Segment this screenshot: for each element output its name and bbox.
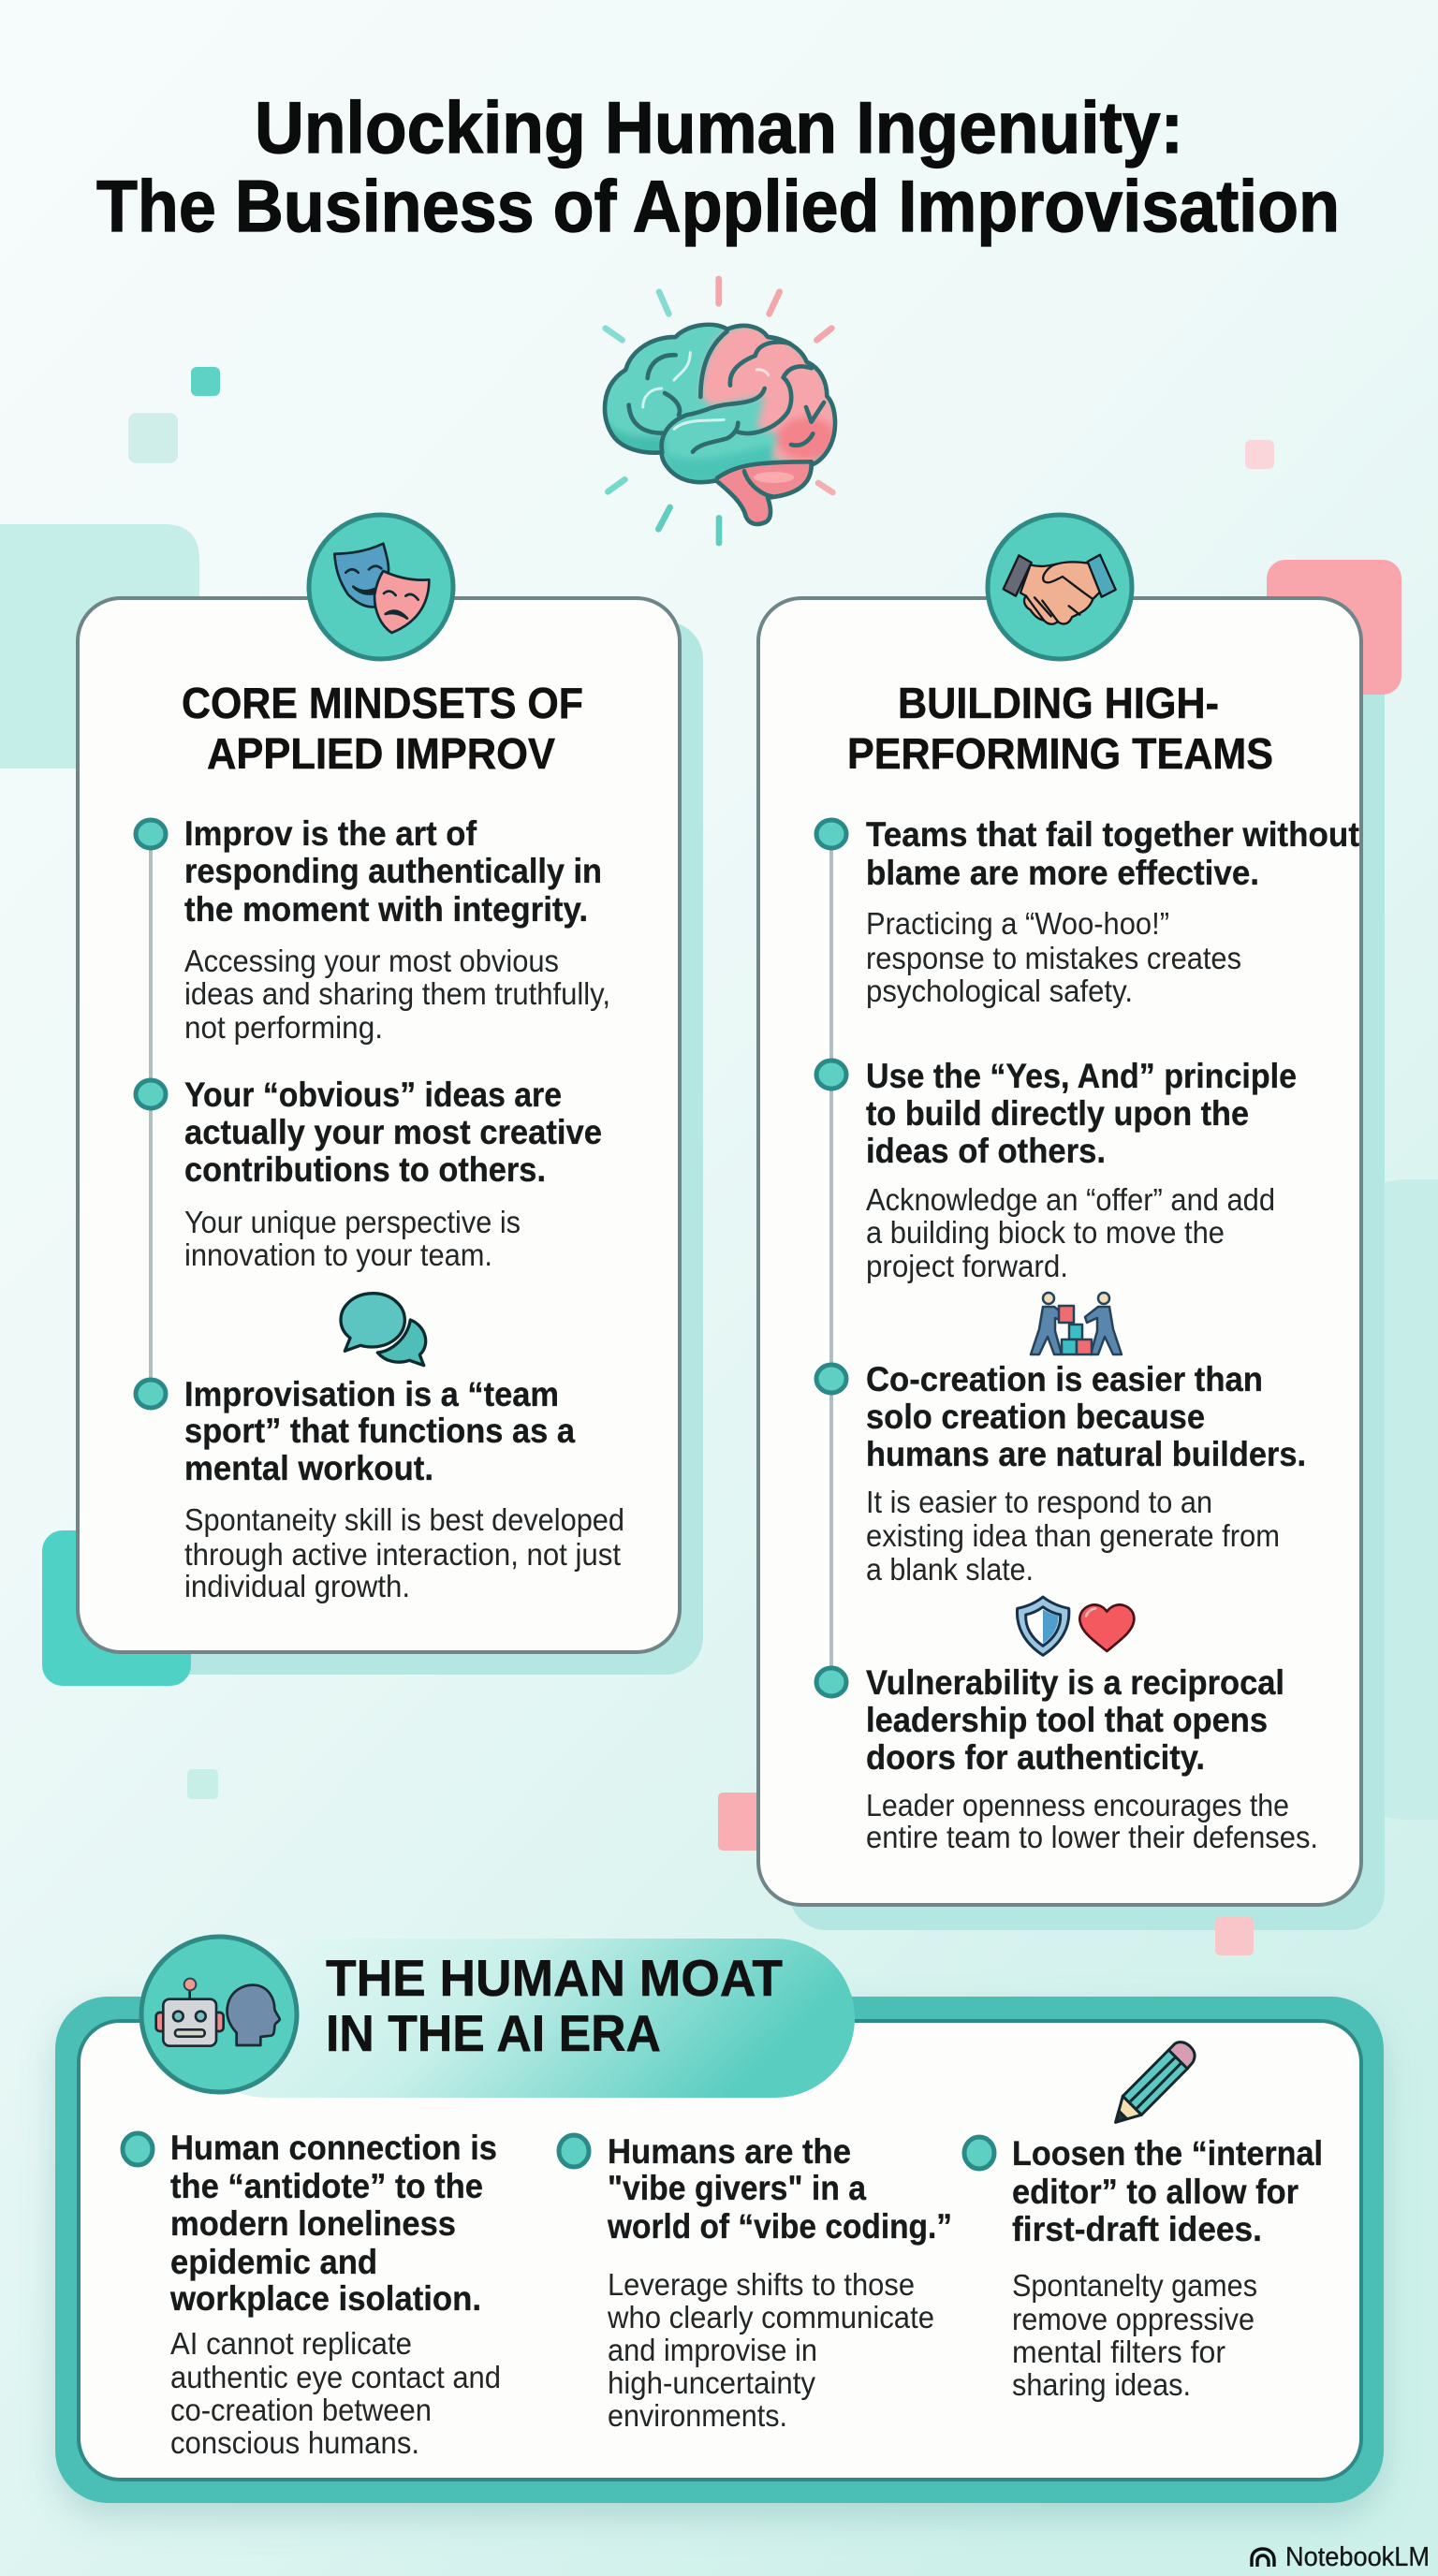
card [758, 598, 1361, 1905]
item: improv art: responding authentically in [184, 852, 602, 890]
column: human connection: conscious humans. [170, 2425, 419, 2460]
icon: robot and human head [141, 1937, 297, 2092]
column: vibe givers: Humans are the [608, 2132, 851, 2171]
column: vibe givers: Leverage shifts to those [608, 2267, 915, 2302]
icon: people building blocks [1031, 1293, 1122, 1354]
decorative square: pink top right [1267, 560, 1401, 695]
item: co-creation: Co-creation is easier than [866, 1360, 1263, 1398]
column: vibe givers: and improvise in [608, 2333, 817, 2367]
title: Unlocking Human Ingenuity: [255, 86, 1183, 168]
icon: speech bubbles [341, 1294, 426, 1366]
item: obvious ideas: innovation to your team. [184, 1237, 492, 1272]
decorative square: pink lower [1215, 1917, 1254, 1955]
column: internal editor: editor” to allow for [1012, 2173, 1299, 2211]
column: human connection: the “antidote” to the [170, 2167, 483, 2205]
item: co-creation [816, 1360, 1306, 1587]
item: obvious ideas: contributions to others. [184, 1150, 546, 1189]
decorative block: right blob [1311, 1179, 1438, 1820]
item: obvious ideas [136, 1076, 602, 1272]
heading: THE HUMAN MOAT [326, 1949, 783, 2007]
panel frame [55, 1997, 1384, 2503]
icon: theatre masks [309, 515, 453, 659]
timeline line [149, 834, 153, 1394]
column: internal editor: Spontanelty games [1012, 2268, 1257, 2303]
panel: core mindsets of applied improv [42, 515, 703, 1686]
item: team sport: Improvisation is a “team [184, 1375, 559, 1413]
heading pill [187, 1939, 855, 2098]
column: internal editor [964, 2134, 1323, 2402]
item: yes and: to build directly upon the [866, 1094, 1249, 1133]
item: team sport: through active interaction, not just [184, 1537, 621, 1572]
panel: the human moat in the ai era [55, 1937, 1384, 2503]
column: vibe givers: "vibe givers" in a [608, 2169, 866, 2207]
item: team sport [136, 1375, 624, 1603]
item: team sport: Spontaneity skill is best developed [184, 1502, 624, 1537]
item: co-creation: a blank slate. [866, 1552, 1034, 1587]
item: fail together: Practicing a “Woo-hoo!” [866, 906, 1169, 941]
column: vibe givers: world of “vibe coding.” [607, 2207, 952, 2246]
column: human connection: authentic eye contact and [170, 2360, 501, 2394]
item: yes and: ideas of others. [866, 1132, 1106, 1170]
decorative square: teal [191, 367, 220, 396]
column: internal editor: Loosen the “internal [1012, 2134, 1323, 2173]
item: yes and: a building biock to move the [866, 1215, 1225, 1250]
timeline line [829, 834, 833, 1682]
item: improv art: not performing. [184, 1010, 383, 1045]
panel interior [79, 2021, 1361, 2480]
item: fail together: blame are more effective. [866, 854, 1259, 892]
heading [847, 679, 1273, 778]
icon: shield and heart [1017, 1597, 1134, 1655]
heading: CORE MINDSETS OF [182, 679, 583, 727]
item: fail together: psychological safety. [866, 973, 1133, 1008]
item: improv art: the moment with integrity. [184, 890, 588, 929]
item: team sport: individual growth. [184, 1569, 410, 1603]
decorative square: pale pink [1245, 440, 1274, 469]
item: fail together: Teams that fail together without [866, 815, 1359, 854]
column: human connection: workplace isolation. [169, 2279, 481, 2318]
icon: brain with rays [593, 279, 849, 543]
title [96, 86, 1340, 247]
decorative square: pink middle [718, 1793, 774, 1851]
item: yes and: project forward. [866, 1249, 1068, 1283]
item: yes and: Acknowledge an “offer” and add [866, 1182, 1275, 1217]
item: yes and [816, 1057, 1297, 1283]
item: vulnerability [816, 1663, 1318, 1854]
column: internal editor: mental filters for [1012, 2334, 1225, 2369]
column: human connection: AI cannot replicate [170, 2326, 412, 2361]
item: improv art: Improv is the art of [184, 814, 477, 853]
item: improv art: Accessing your most obvious [184, 944, 559, 978]
card backing [112, 622, 703, 1675]
item: fail together [816, 815, 1359, 1008]
column: human connection: epidemic and [170, 2243, 377, 2281]
decorative square: pale teal lower [187, 1769, 218, 1799]
column: internal editor: first-draft idees. [1012, 2210, 1262, 2248]
title: The Business of Applied Improvisation [96, 165, 1340, 247]
column: vibe givers [559, 2132, 952, 2433]
column: vibe givers: environments. [608, 2398, 787, 2433]
heading: APPLIED IMPROV [207, 729, 555, 778]
item: vulnerability: Leader openness encourages the [866, 1788, 1289, 1822]
heading [326, 1949, 783, 2062]
item: vulnerability: Vulnerability is a reciprocal [866, 1663, 1284, 1702]
column: vibe givers: high-uncertainty [608, 2365, 815, 2400]
card backing [789, 618, 1385, 1930]
decorative block: top left [0, 524, 199, 768]
item: co-creation: solo creation because [866, 1398, 1205, 1436]
item: co-creation: existing idea than generate from [866, 1518, 1280, 1553]
icon: pencil [1116, 2042, 1195, 2122]
heading: PERFORMING TEAMS [847, 729, 1273, 778]
item: improv art: ideas and sharing them truthfully, [184, 976, 610, 1011]
decorative square: pale teal [128, 413, 178, 463]
NotebookLM logo: NotebookLM [1285, 2542, 1430, 2572]
item: vulnerability: doors for authenticity. [866, 1738, 1205, 1777]
item: co-creation: It is easier to respond to an [866, 1485, 1212, 1519]
column: human connection: modern loneliness [170, 2204, 456, 2243]
column: internal editor: remove oppressive [1012, 2302, 1255, 2336]
heading: BUILDING HIGH- [898, 679, 1219, 727]
item: improv art [136, 814, 610, 1045]
heading: IN THE AI ERA [326, 2004, 661, 2062]
heading [182, 679, 583, 778]
item: co-creation: humans are natural builders. [866, 1435, 1306, 1473]
column: human connection [123, 2129, 501, 2460]
item: team sport: mental workout. [184, 1449, 433, 1487]
icon: handshake [988, 515, 1132, 659]
column: human connection: Human connection is [170, 2129, 497, 2167]
item: obvious ideas: Your “obvious” ideas are [184, 1076, 562, 1114]
decorative square: teal bottom left [42, 1530, 191, 1686]
column: vibe givers: who clearly communicate [607, 2300, 934, 2334]
card [78, 598, 680, 1652]
item: obvious ideas: actually your most creative [184, 1113, 602, 1151]
item: team sport: sport” that functions as a [184, 1412, 575, 1450]
column: human connection: co-creation between [170, 2393, 432, 2427]
item: yes and: Use the “Yes, And” principle [866, 1057, 1297, 1095]
item: obvious ideas: Your unique perspective is [184, 1205, 521, 1239]
item: fail together: response to mistakes creates [866, 941, 1241, 975]
item: vulnerability: leadership tool that opens [866, 1701, 1268, 1739]
column: internal editor: sharing ideas. [1012, 2367, 1191, 2402]
panel: building high-performing teams [758, 515, 1401, 1955]
item: vulnerability: entire team to lower their defenses. [866, 1820, 1318, 1854]
